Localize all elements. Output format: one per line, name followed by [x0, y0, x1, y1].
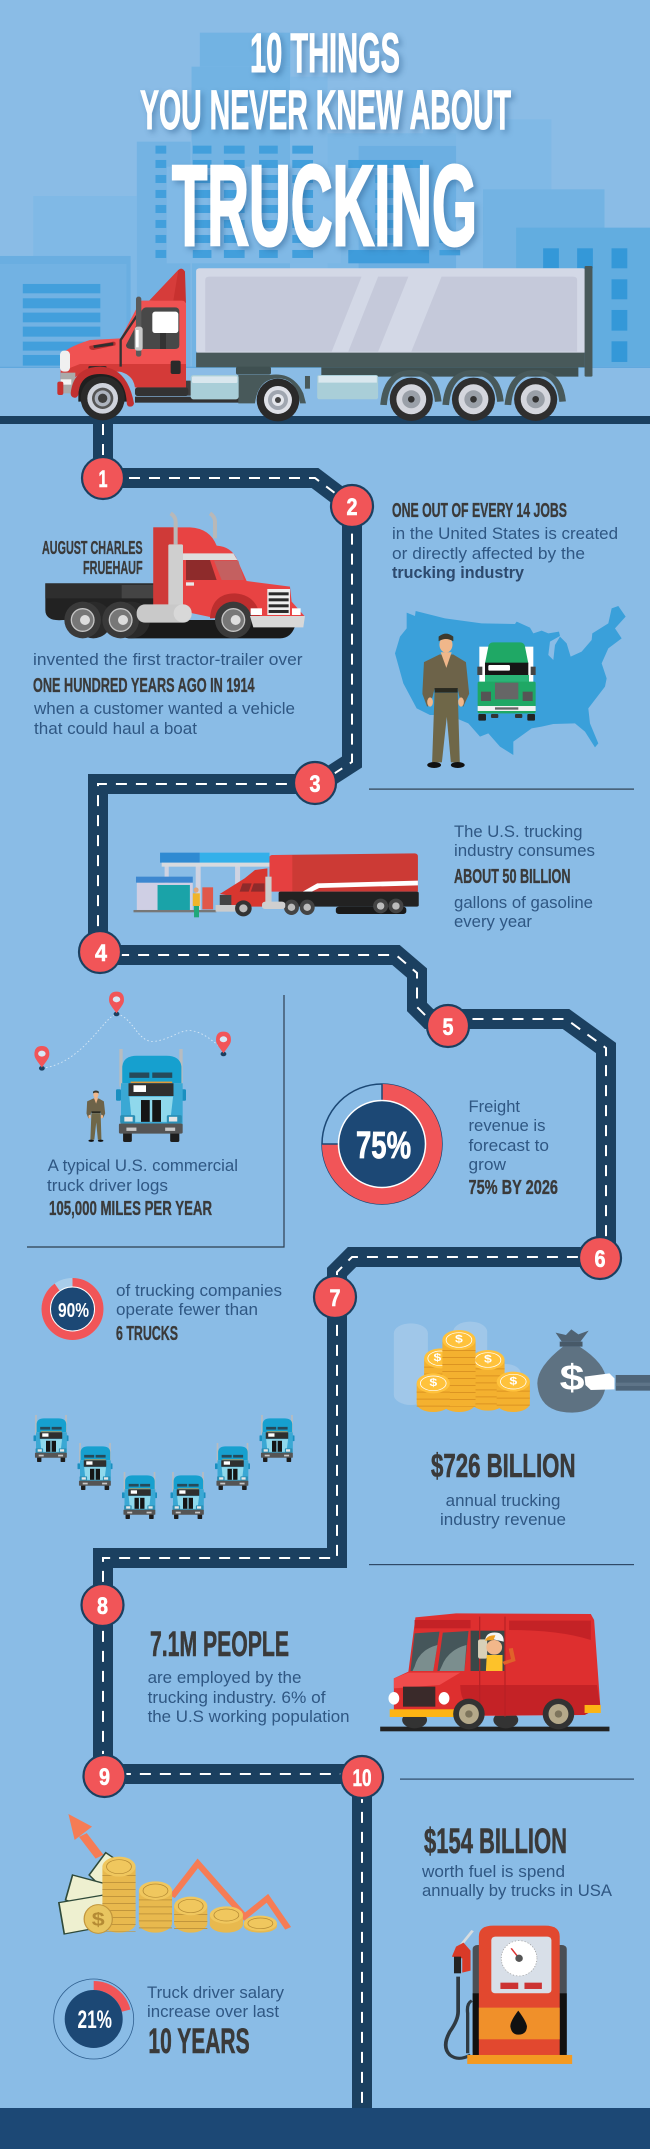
- milestone 8: [82, 1584, 124, 1626]
- name label: [42, 537, 143, 578]
- chart: 75% donut: [322, 1084, 442, 1204]
- footer bar: [0, 2108, 650, 2149]
- panel: fact 8: [148, 1613, 609, 1731]
- milestone 8: 8: [97, 1593, 108, 1620]
- milestone 5: [427, 1005, 469, 1047]
- milestone 3: 3: [310, 771, 320, 798]
- icon: driver: [86, 1091, 105, 1142]
- text block: [468, 1098, 558, 1199]
- milestone 1: 1: [98, 466, 108, 493]
- text block: invented the first tractor-trailer over: [33, 651, 303, 669]
- text block: trucking industry: [392, 564, 525, 582]
- text block: every year: [454, 913, 533, 931]
- milestone 2: 2: [346, 494, 358, 521]
- text block: worth fuel is spend: [421, 1863, 565, 1881]
- text block: revenue is: [468, 1117, 546, 1135]
- milestone 10: 10: [352, 1765, 372, 1792]
- name label: FRUEHAUF: [83, 557, 143, 578]
- icons: six blue trucks: [34, 1415, 294, 1519]
- text block: $726 BILLION: [431, 1447, 576, 1484]
- text block: [392, 500, 618, 582]
- milestone 9: [84, 1755, 126, 1797]
- text block: industry revenue: [440, 1511, 566, 1529]
- text block: operate fewer than: [116, 1301, 258, 1319]
- milestone 1: [82, 457, 124, 499]
- text block: in the United States is created: [392, 525, 618, 543]
- hero truck: [57, 266, 592, 421]
- illustration: red van and driver: [380, 1613, 609, 1731]
- text block: forecast to: [468, 1137, 549, 1155]
- text block: of trucking companies: [116, 1282, 282, 1300]
- milestone 4: [79, 931, 121, 973]
- road: [0, 416, 650, 2108]
- illustration: coins and money bag: $: [455, 1332, 463, 1345]
- chart: 21% donut: 21%: [78, 2006, 112, 2034]
- divider: [27, 995, 284, 1247]
- text block: grow: [468, 1156, 506, 1174]
- icon: blue truck: [116, 1049, 186, 1142]
- chart: 90% donut: 90%: [58, 1300, 89, 1322]
- text block: 105,000 MILES PER YEAR: [49, 1198, 212, 1220]
- text block: [431, 1447, 576, 1529]
- text block: [148, 1625, 350, 1726]
- illustration: red truck: [45, 513, 305, 638]
- text block: annual trucking: [446, 1492, 560, 1510]
- illustration: fuel pump: [446, 1926, 572, 2064]
- panel: fact 7: [34, 1282, 294, 1519]
- panel: fact 1: [33, 513, 305, 738]
- divider: [400, 1778, 634, 1780]
- illustration: coins and money bag: $: [560, 1357, 585, 1398]
- text block: Truck driver salary: [147, 1984, 285, 2002]
- text block: [33, 651, 303, 738]
- text block: [454, 823, 595, 931]
- milestone 4: 4: [95, 940, 108, 967]
- text block: ABOUT 50 BILLION: [454, 866, 570, 888]
- milestone 10: [341, 1756, 383, 1798]
- chart: 90% donut: [46, 1282, 99, 1336]
- text block: The U.S. trucking: [454, 823, 582, 841]
- illustration: coins and money bag: $: [484, 1352, 492, 1365]
- text block: Freight: [468, 1098, 520, 1116]
- illustration: money and rising arrow: [59, 1814, 288, 1934]
- text block: $154 BILLION: [424, 1822, 567, 1861]
- text block: 10 YEARS: [148, 2022, 250, 2061]
- text block: 7.1M PEOPLE: [150, 1625, 289, 1664]
- illustration: coins and money bag: [394, 1322, 650, 1413]
- route map with pins: [34, 992, 231, 1071]
- text block: the U.S working population: [148, 1708, 350, 1726]
- text block: [147, 1984, 285, 2061]
- text block: [421, 1822, 612, 1900]
- text block: industry consumes: [454, 842, 595, 860]
- name label: AUGUST CHARLES: [42, 537, 143, 558]
- text block: A typical U.S. commercial: [48, 1157, 238, 1175]
- panel: fact 5: [322, 1084, 558, 1204]
- panel: fact 2: [392, 500, 626, 768]
- text block: 6 TRUCKS: [116, 1323, 178, 1345]
- chart: 21% donut: [54, 1979, 134, 2059]
- milestone 9: 9: [99, 1764, 110, 1791]
- milestone 7: 7: [330, 1285, 340, 1312]
- city skyline: [0, 33, 650, 450]
- milestone 5: 5: [442, 1014, 454, 1041]
- illustration: coins and money bag: $: [429, 1375, 437, 1389]
- text block: trucking industry. 6% of: [148, 1689, 326, 1707]
- text block: when a customer wanted a vehicle: [33, 700, 295, 718]
- title: [140, 21, 511, 270]
- panel: fact 6: [394, 1322, 650, 1529]
- text block: gallons of gasoline: [454, 894, 593, 912]
- divider: [369, 788, 634, 790]
- panel: fact 4: [34, 992, 238, 1220]
- text block: or directly affected by the: [392, 545, 585, 563]
- milestone 2: [331, 485, 373, 527]
- panel: fact 3: [134, 823, 595, 931]
- divider: [369, 1564, 634, 1565]
- text block: 75% BY 2026: [468, 1177, 558, 1199]
- text block: increase over last: [147, 2003, 279, 2021]
- text block: annually by trucks in USA: [422, 1882, 612, 1900]
- text block: that could haul a boat: [34, 720, 197, 738]
- milestone 3: [294, 762, 336, 804]
- illustration: coins and money bag: $: [433, 1350, 441, 1364]
- trailer and rear wheels: [196, 266, 592, 421]
- text block: [116, 1282, 282, 1345]
- panel: fact 10: [421, 1822, 612, 2064]
- milestone 6: 6: [594, 1246, 606, 1273]
- illustration: US map with driver and green truck: [395, 606, 626, 768]
- chart: 75% donut: 75%: [356, 1125, 411, 1167]
- illustration: money and rising arrow: $: [92, 1910, 105, 1930]
- text block: ONE HUNDRED YEARS AGO IN 1914: [33, 675, 255, 697]
- illustration: coins and money bag: $: [509, 1374, 517, 1387]
- text block: [47, 1157, 238, 1220]
- text block: are employed by the: [148, 1669, 301, 1687]
- milestone 6: [579, 1237, 621, 1279]
- panel: fact 9: [54, 1814, 288, 2061]
- cab and front wheels: [57, 269, 310, 421]
- milestone 7: [314, 1276, 356, 1318]
- illustration: gas station and red truck: [134, 853, 419, 917]
- title: 10 THINGS: [250, 21, 400, 84]
- text block: truck driver logs: [47, 1177, 168, 1195]
